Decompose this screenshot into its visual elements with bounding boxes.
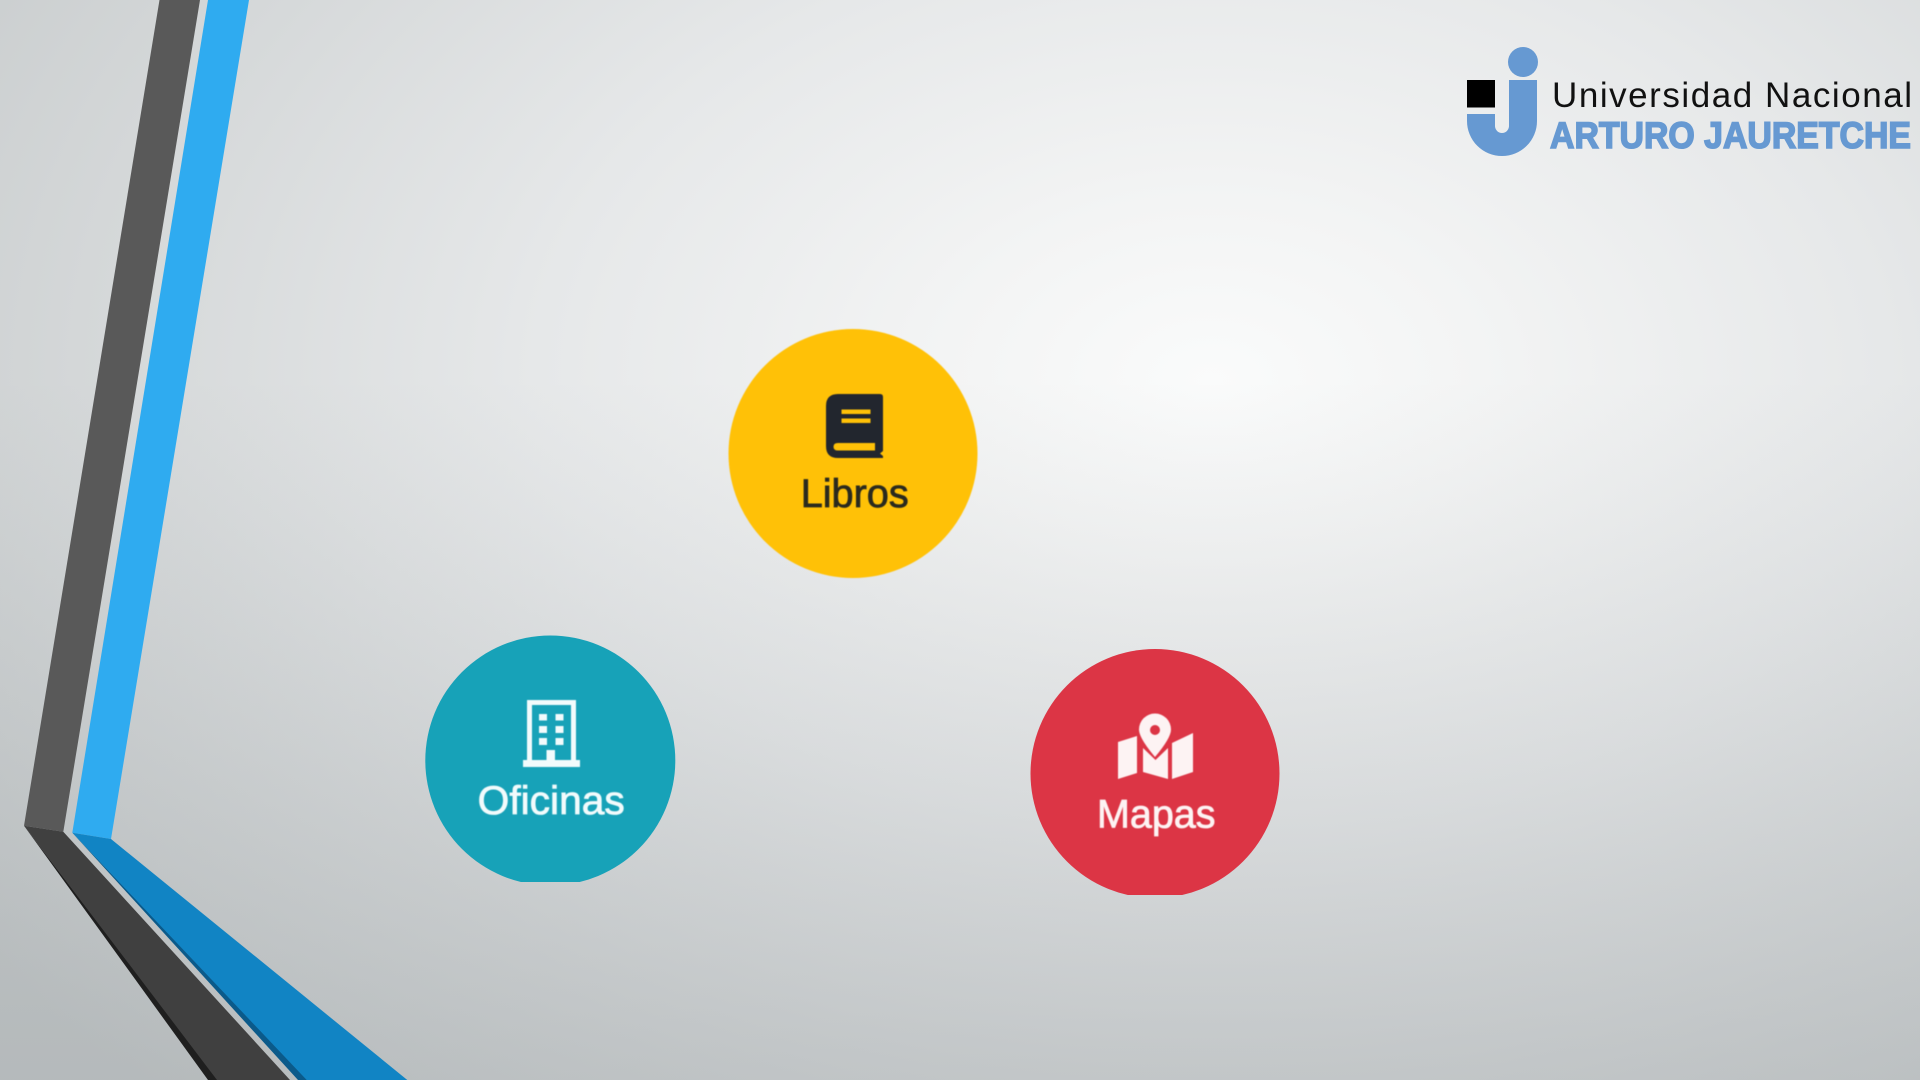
band: blue lower: [72, 833, 407, 1080]
band: blue upper: [72, 0, 249, 839]
band: blue shadow edge: [72, 833, 308, 1080]
label: Libros: Libros: [801, 472, 909, 516]
label: Oficinas: Oficinas: [478, 779, 625, 823]
teal disc: [425, 636, 675, 886]
circle: Mapas: [1030, 649, 1280, 898]
decorative chevron bands: [24, 0, 407, 1080]
icon: book: [826, 394, 883, 458]
label: Mapas: Mapas: [1097, 793, 1216, 837]
yellow disc: [728, 329, 978, 578]
circle: Libros: [728, 329, 978, 578]
logo icon: letter j: [1467, 80, 1537, 156]
red disc: [1030, 649, 1280, 898]
icon: building: [523, 700, 580, 767]
band: grey upper: [24, 0, 200, 832]
circle: Oficinas: [425, 636, 675, 886]
icon: map with pin: [1118, 714, 1193, 779]
logo icon: black square: [1467, 80, 1495, 108]
logo: Universidad Nacional Arturo Jauretche: [1467, 47, 1912, 156]
logo icon: dot: [1508, 47, 1538, 77]
logo text: Universidad Nacional: Universidad Nacional: [1552, 76, 1912, 115]
band: dark shadow edge: [24, 826, 218, 1080]
band: dark lower: [24, 826, 290, 1080]
